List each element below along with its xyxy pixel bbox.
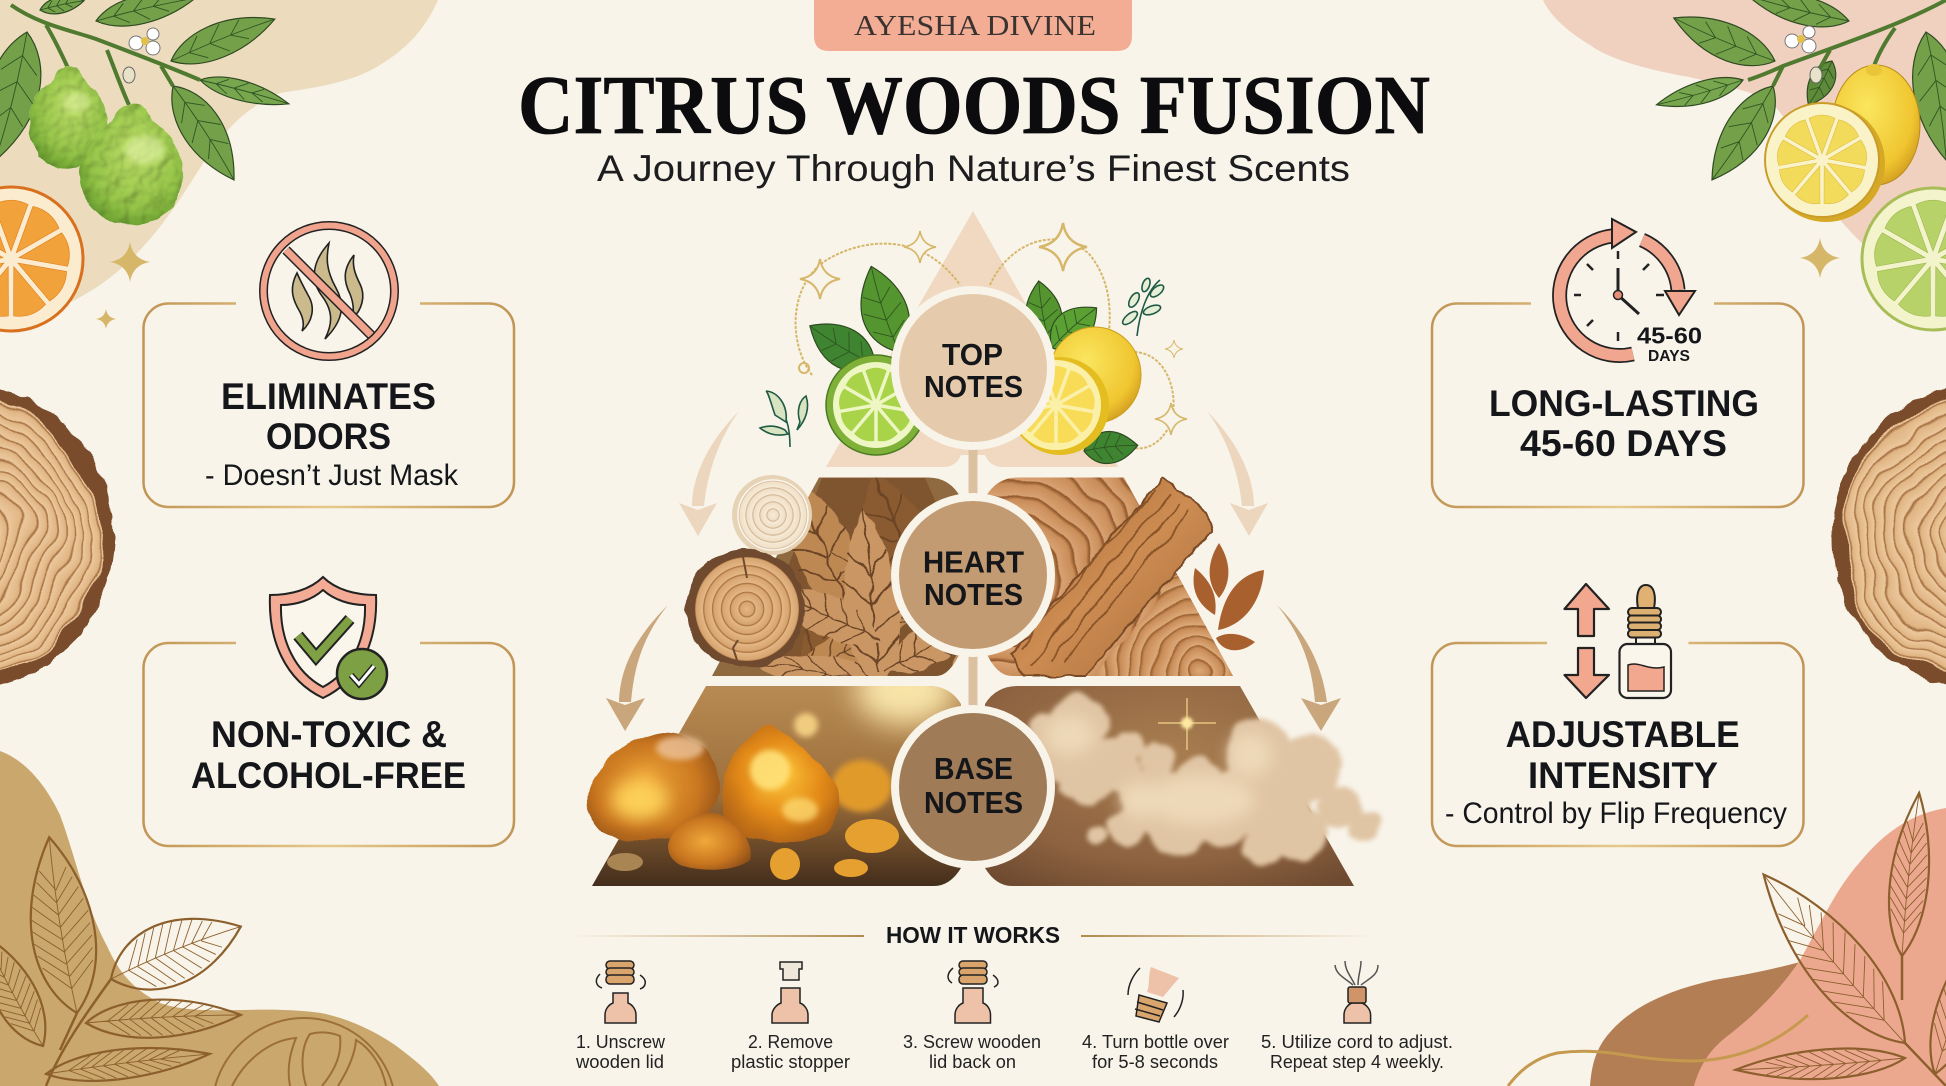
- orange slice outline: [215, 1018, 393, 1086]
- step 1: [575, 961, 666, 1072]
- wood slice left: [0, 383, 114, 691]
- heading line 2: ODORS: [266, 416, 391, 457]
- caption line 2: for 5-8 seconds: [1092, 1051, 1218, 1072]
- heading: HOW IT WORKS: [886, 922, 1060, 948]
- panel: eliminates odors: [144, 226, 514, 507]
- glint: [1158, 698, 1216, 750]
- corner decoration: top-right lemon branch: [1543, 0, 1946, 300]
- heading line 2: 45-60 DAYS: [1520, 423, 1727, 464]
- amber stones: [586, 726, 899, 880]
- circle: base notes: [891, 705, 1055, 869]
- caption: 5. Utilize cord to adjust.: [1261, 1031, 1453, 1052]
- citrus: bergamot half and leaves: [799, 260, 926, 455]
- corner decoration: top-left bergamot branch: [0, 0, 438, 330]
- circle: top notes: TOP: [942, 337, 1003, 372]
- step 5: [1261, 961, 1453, 1072]
- smoke clouds: [1029, 695, 1380, 865]
- citrus: lemons and leaves: [1010, 278, 1141, 466]
- circle: heart notes: NOTES: [924, 577, 1023, 612]
- log: [685, 548, 805, 668]
- caption: 1. Unscrew: [576, 1031, 666, 1052]
- subtext: - Control by Flip Frequency: [1445, 797, 1787, 830]
- circle: heart notes: [891, 493, 1055, 657]
- step 2: [731, 962, 850, 1072]
- arrow: lower left: [606, 605, 668, 731]
- wood slice right: [1832, 383, 1946, 691]
- subtext: - Doesn’t Just Mask: [205, 459, 459, 492]
- caption: 2. Remove: [748, 1031, 833, 1052]
- brand badge: AYESHA DIVINE: [854, 10, 1096, 42]
- panel: long-lasting: [1432, 219, 1804, 507]
- brown leaves: [1194, 543, 1264, 650]
- gold rings: [796, 239, 1174, 448]
- icon: unscrew lid: [596, 961, 645, 1023]
- pyramid: base tier right, smoke: [980, 680, 1380, 890]
- icon: arrows and bottle: [1564, 584, 1671, 698]
- sparkle right: [1800, 238, 1840, 278]
- corner decoration: orange slice: [0, 187, 83, 331]
- caption line 2: Repeat step 4 weekly.: [1270, 1051, 1444, 1072]
- heading: ADJUSTABLE: [1506, 714, 1740, 755]
- circle: top notes: [891, 286, 1055, 450]
- icon: green sprig: [1121, 277, 1166, 336]
- icon: remove stopper: [772, 962, 808, 1023]
- icon: clock: [1560, 219, 1702, 365]
- corner decoration: lime slice: [1862, 188, 1946, 330]
- caption line 2: wooden lid: [575, 1051, 664, 1072]
- circle: base notes: NOTES: [924, 785, 1023, 820]
- caption line 2: plastic stopper: [731, 1051, 850, 1072]
- wood stick: [1010, 478, 1212, 676]
- step 4: [1082, 967, 1229, 1072]
- heading: LONG-LASTING: [1489, 383, 1759, 424]
- caption: 3. Screw wooden: [903, 1031, 1041, 1052]
- corner decoration: bottom-left tan blob with line leaves: [0, 751, 439, 1086]
- title: CITRUS WOODS FUSION: [518, 59, 1430, 152]
- heading line 2: ALCOHOL-FREE: [191, 755, 466, 796]
- pyramid: base tier left, amber: [586, 686, 961, 886]
- heading line 2: INTENSITY: [1528, 755, 1718, 796]
- corner decoration: bottom-right peach and brown blobs with line leaves: [1508, 791, 1946, 1086]
- icon: small leaf sprig: [760, 391, 808, 447]
- arrow: top left: [679, 411, 739, 536]
- pyramid: heart tier right: [987, 476, 1264, 678]
- circle: base notes: BASE: [934, 751, 1013, 786]
- icon: clock: 45-60: [1637, 322, 1702, 348]
- caption: 4. Turn bottle over: [1082, 1031, 1229, 1052]
- subtitle: A Journey Through Nature’s Finest Scents: [597, 148, 1350, 189]
- icon: shield: [270, 577, 387, 699]
- pyramid: heart tier left: [684, 475, 959, 676]
- caption line 2: lid back on: [929, 1051, 1016, 1072]
- pale log: [732, 475, 812, 555]
- pyramid: top tier: [760, 211, 1187, 467]
- icon: reed cord: [1335, 961, 1378, 1023]
- heading: NON-TOXIC &: [211, 714, 447, 755]
- gold sparkles: [800, 223, 1187, 435]
- icon: screw lid on: [948, 961, 998, 1023]
- brand badge: [814, 0, 1132, 51]
- circle: heart notes: HEART: [923, 544, 1024, 580]
- circle: top notes: NOTES: [924, 369, 1023, 404]
- panel: non-toxic: [144, 577, 514, 846]
- icon: no odor: [264, 226, 394, 356]
- panel: adjustable intensity: [1432, 584, 1804, 846]
- sparkles left: [96, 242, 150, 329]
- arrow: top right: [1207, 411, 1268, 536]
- pyramid connector: [968, 440, 978, 730]
- icon: clock: DAYS: [1648, 348, 1690, 365]
- arrow: lower right: [1277, 605, 1341, 731]
- step 3: [903, 961, 1041, 1072]
- icon: turn bottle over: [1128, 967, 1183, 1022]
- heading: ELIMINATES: [221, 376, 436, 417]
